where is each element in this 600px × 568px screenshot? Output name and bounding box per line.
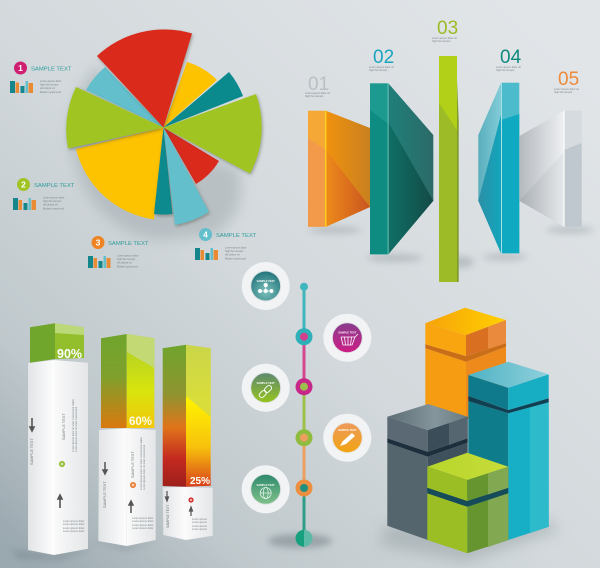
box small text: Lorem ipsum dolor: [63, 522, 85, 526]
value: 60%: [129, 416, 152, 428]
prism 02 teal: [370, 83, 433, 254]
number 02: 02: [373, 47, 394, 68]
bullet: [188, 497, 194, 503]
disc pencil icon: [323, 414, 371, 462]
badge 3: 3: [96, 238, 101, 248]
prism chart: [305, 18, 594, 282]
number 02: Lorem ipsum dolor sit: [369, 65, 394, 69]
timeline: [242, 262, 371, 548]
number 05: Lorem ipsum dolor sit: [554, 87, 579, 91]
badge 1: 1: [18, 63, 23, 73]
wedge: yellow small: [164, 62, 217, 128]
rotated body text: Lorem ipsum dolor sit amet consectetur: [142, 444, 146, 490]
box small text: Lorem ipsum dolor: [63, 526, 85, 530]
box small text: Lorem ipsum dolor: [132, 523, 154, 527]
pie chart: [66, 29, 262, 240]
box small text: Lorem ipsum: [192, 524, 207, 528]
wedge: light blue bottom: [164, 128, 209, 225]
body text 1: elit dolore sit: [40, 86, 55, 90]
legend item 2: [13, 178, 75, 210]
label 2: SAMPLE TEXT: [34, 183, 75, 189]
blue column: [468, 362, 549, 540]
number 01: Lorem ipsum dolor sit: [305, 91, 330, 95]
rotated body text: Lorem ipsum dolor sit amet consectetur: [74, 406, 78, 452]
wedge: green right: [164, 94, 262, 174]
vertical labels: SAMPLE TEXT: [130, 451, 135, 478]
body text 1: Lorem ipsum dolor: [40, 79, 62, 83]
label 1: SAMPLE TEXT: [31, 66, 72, 72]
line segments: [302, 287, 306, 538]
node top: [300, 283, 308, 291]
base shadow: [268, 534, 332, 548]
number 01: 01: [308, 74, 329, 95]
mini bars 3: [88, 256, 110, 268]
body text 3: Lorem ipsum dolor: [117, 254, 139, 258]
disc cart icon: [323, 314, 371, 362]
number 05: 05: [558, 69, 579, 90]
body text 2: Modern great soul: [43, 206, 64, 210]
box 90 percent: [28, 323, 88, 555]
wedge: light blue top: [86, 67, 164, 128]
node base: [296, 530, 312, 547]
number 03: Lorem ipsum dolor sit: [432, 36, 457, 40]
rotated body text: Lorem ipsum dolor sit amet consectetur adipis: [139, 436, 143, 490]
gray column: [387, 404, 468, 540]
prism 05 white: [519, 111, 582, 227]
body text 4: elit dolore sit: [225, 253, 240, 257]
number 03: high five tempor: [432, 39, 451, 43]
box 90 percent: SAMPLE TEXT: [29, 438, 34, 465]
disc globe icon: SAMPLE TEXT: [257, 483, 275, 487]
node pink: [296, 378, 312, 395]
disc globe icon: [242, 465, 290, 513]
body text 4: Modern great soul: [225, 256, 246, 260]
vertical labels: SAMPLE TEXT: [61, 413, 66, 440]
body text 3: elit dolore sit: [117, 261, 132, 265]
bullet: [59, 461, 65, 467]
arrows: [30, 418, 62, 508]
box 25 percent: [163, 345, 213, 540]
box small text: Lorem ipsum: [192, 520, 207, 524]
number 05: high five tempor: [554, 90, 573, 94]
wedge: yellow large: [76, 128, 164, 220]
prism shadows: [309, 226, 594, 268]
node green: [296, 429, 312, 446]
body text 3: high five tempor: [117, 257, 136, 261]
box small text: Lorem ipsum dolor: [132, 526, 154, 530]
arrows: [166, 491, 192, 516]
body text 1: high five tempor: [40, 83, 59, 87]
cube chart: [380, 308, 560, 562]
box small text: Lorem ipsum dolor: [132, 516, 154, 520]
box 60 percent: [98, 334, 156, 546]
disc share icon: [242, 262, 290, 310]
disc share icon: SAMPLE TEXT: [257, 279, 275, 283]
disc pencil icon: SAMPLE TEXT: [338, 428, 357, 432]
prism 04 blue: [478, 83, 519, 253]
percentage boxes: [12, 323, 213, 560]
rotated body text: Lorem ipsum dolor sit amet consectetur adipis: [71, 398, 75, 452]
box small text: Lorem ipsum dolor: [63, 519, 85, 523]
number 04: 04: [500, 47, 522, 68]
box shadows: [12, 540, 160, 560]
body text 2: high five tempor: [43, 199, 62, 203]
icon: cart: [341, 334, 358, 345]
number 02: high five tempor: [369, 68, 388, 72]
node teal: [296, 328, 312, 345]
icon: pencil: [340, 433, 355, 446]
legend item 1: [10, 62, 72, 94]
box small text: Lorem ipsum dolor: [63, 529, 85, 533]
box small text: Lorem ipsum dolor: [132, 519, 154, 523]
prism 03 green: [439, 56, 459, 282]
prism 01 orange: [308, 111, 370, 227]
wedge: red large: [97, 29, 192, 127]
number 03: [432, 18, 458, 43]
body text 2: elit dolore sit: [43, 203, 58, 207]
icon: chain link: [258, 384, 273, 399]
number 04: high five tempor: [496, 68, 515, 72]
wedge: red small: [164, 128, 219, 184]
legend item 4: [195, 228, 257, 260]
pie shadow: [71, 66, 241, 240]
number 03: 03: [437, 18, 458, 39]
body text 4: Lorem ipsum dolor: [225, 246, 247, 250]
value: 90%: [57, 347, 82, 361]
box small text: Lorem ipsum: [192, 517, 207, 521]
cube shadow: [380, 520, 560, 562]
disc link icon: [242, 364, 290, 412]
mini bars 1: [10, 81, 33, 93]
wedge: green left: [66, 87, 164, 148]
box 60 percent: SAMPLE TEXT: [102, 481, 107, 508]
wedge: teal top: [164, 72, 243, 128]
number 04: Lorem ipsum dolor sit: [496, 65, 521, 69]
mini bars 4: [195, 248, 218, 260]
body text 3: Modern great soul: [117, 264, 138, 268]
label 3: SAMPLE TEXT: [108, 241, 149, 247]
green column: [427, 453, 508, 553]
disc link icon: SAMPLE TEXT: [257, 381, 275, 385]
badge 4: 4: [203, 230, 208, 240]
icon: network: [258, 283, 273, 293]
orange column: [425, 308, 506, 420]
label 4: SAMPLE TEXT: [216, 233, 257, 239]
body text 2: Lorem ipsum dolor: [43, 196, 65, 200]
vertical label: SAMPLE TEXT: [166, 505, 170, 528]
body text 1: Modern great soul: [40, 90, 61, 94]
legend item 3: [88, 236, 149, 268]
mini bars 2: [13, 198, 36, 210]
number 01: high five tempor: [305, 94, 324, 98]
node orange: [296, 480, 312, 496]
body text 4: high five tempor: [225, 249, 244, 253]
badge 2: 2: [21, 180, 26, 190]
value: 25%: [190, 476, 210, 487]
box small text: [63, 516, 207, 533]
wedge: teal bottom: [154, 128, 172, 214]
arrows: [103, 462, 133, 513]
box small text: Lorem ipsum: [192, 527, 207, 531]
icon: globe: [260, 488, 271, 498]
disc cart icon: SAMPLE TEXT: [338, 330, 357, 334]
bullet: [130, 482, 136, 488]
